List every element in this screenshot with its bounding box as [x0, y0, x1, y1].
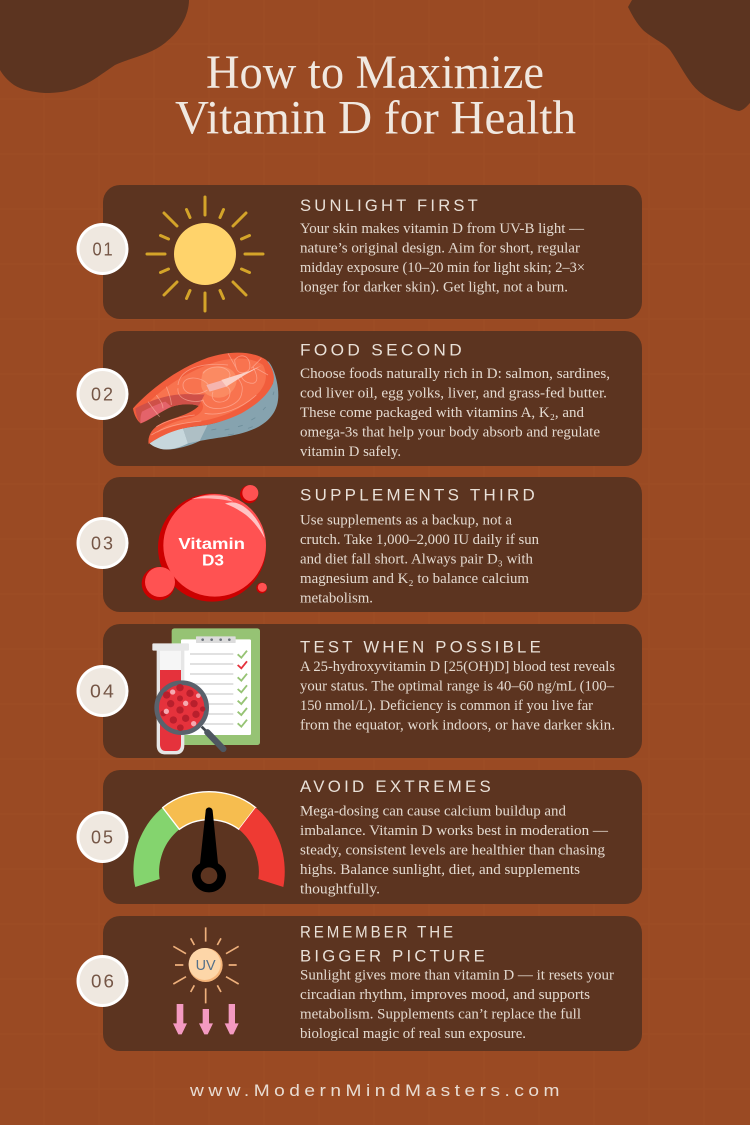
heading: avoid extremes: AVOID EXTREMES	[300, 778, 494, 796]
panel 1: sunlight first	[76, 185, 642, 319]
text: food second: vitamin D safely.	[300, 444, 401, 460]
text: food second: cod liver oil, egg yolks, liver, and grass-fed butter.	[300, 386, 607, 402]
heading: remember the bigger picture	[300, 924, 488, 966]
icon: UV sun with arrows: UV	[196, 958, 216, 974]
icon: blood test and clipboard	[152, 628, 260, 754]
text: avoid extremes: imbalance. Vitamin D works best in moderation —	[300, 823, 608, 839]
text: remember the bigger picture: metabolism. Supplements can’t replace the full	[300, 1006, 581, 1022]
text: sunlight first: longer for darker skin). Get light, not a burn.	[300, 280, 568, 296]
text: food second: These come packaged with vitamins A, K₂, and	[300, 405, 585, 421]
panel 3: supplements third	[76, 477, 642, 612]
number badge 02	[76, 368, 128, 420]
panel 5: avoid extremes	[76, 770, 642, 904]
text: sunlight first	[300, 221, 585, 296]
panel 2: food second	[76, 331, 642, 466]
text: food second: Choose foods naturally rich in D: salmon, sardines,	[300, 366, 610, 382]
text: sunlight first: Your skin makes vitamin D from UV-B light —	[300, 221, 584, 237]
heading: test when possible: TEST WHEN POSSIBLE	[300, 638, 544, 656]
text: sunlight first: midday exposure (10–20 min for light skin; 2–3×	[300, 260, 585, 276]
text: sunlight first: nature’s original design. Aim for short, regular	[300, 240, 580, 256]
decorative blob: top right	[628, 0, 750, 111]
text: food second: omega-3s that help your body absorb and regulate	[300, 424, 600, 440]
text: supplements third: and diet fall short. Always pair D₃ with	[300, 552, 534, 568]
panel 6: remember the bigger picture	[76, 916, 642, 1051]
decorative blob: top left	[0, 0, 189, 93]
heading: remember the bigger picture: REMEMBER THE	[300, 924, 456, 942]
text: supplements third: Use supplements as a backup, not a	[300, 512, 513, 528]
number badge 01: 01	[92, 240, 114, 260]
text: remember the bigger picture	[300, 968, 614, 1042]
footer url: www.ModernMindMasters.com	[189, 1081, 564, 1100]
number badge 06: 06	[91, 972, 116, 992]
number badge 03: 03	[91, 534, 115, 554]
number badge 05: 05	[91, 828, 115, 848]
text: avoid extremes: thoughtfully.	[300, 882, 380, 898]
heading: food second: FOOD SECOND	[300, 342, 465, 360]
text: supplements third: metabolism.	[300, 590, 373, 606]
text: remember the bigger picture: biological magic of real sun exposure.	[300, 1026, 526, 1042]
number badge 03	[76, 517, 128, 569]
label: Vitamin D3	[178, 536, 245, 570]
label: Vitamin D3: D3	[202, 553, 224, 570]
number badge 02: 02	[91, 384, 115, 404]
text: remember the bigger picture: Sunlight gives more than vitamin D — it resets your	[300, 968, 614, 984]
heading: supplements third: SUPPLEMENTS THIRD	[300, 486, 538, 504]
text: supplements third: magnesium and K₂ to balance calcium	[300, 571, 530, 587]
text: supplements third	[300, 512, 540, 606]
text: avoid extremes: highs. Balance sunlight, diet, and supplements	[300, 862, 580, 878]
icon: gauge	[133, 792, 285, 892]
text: supplements third: crutch. Take 1,000–2,000 IU daily if sun	[300, 532, 540, 548]
text: test when possible: 150 nmol/L). Deficiency is common if you live far	[300, 698, 593, 714]
icon: salmon steak	[133, 353, 278, 449]
number badge 05	[76, 811, 128, 863]
text: test when possible: from the equator, work indoors, or have darker skin.	[300, 718, 615, 734]
number badge 04: 04	[90, 682, 116, 702]
number badge 06	[76, 955, 128, 1007]
icon: vitamin D3 droplet	[142, 485, 267, 602]
label: Vitamin D3: Vitamin	[178, 536, 245, 553]
number badge 01	[76, 223, 128, 275]
title	[175, 47, 576, 144]
text: food second	[300, 366, 610, 460]
icon: UV sun with arrows	[173, 927, 239, 1034]
text: avoid extremes	[300, 804, 608, 898]
number badge 04	[76, 665, 128, 717]
heading: sunlight first: SUNLIGHT FIRST	[300, 197, 481, 215]
text: avoid extremes: steady, consistent levels are healthier than chasing	[300, 842, 606, 858]
heading: remember the bigger picture: BIGGER PICTURE	[300, 948, 488, 966]
panel 4: test when possible	[76, 624, 642, 758]
title: Vitamin D for Health	[175, 92, 576, 144]
text: test when possible: your status. The optimal range is 40–60 ng/mL (100–	[300, 678, 615, 694]
text: test when possible	[300, 659, 615, 734]
icon: sun	[147, 197, 263, 311]
title: How to Maximize	[206, 47, 544, 99]
text: remember the bigger picture: circadian rhythm, improves mood, and supports	[300, 987, 590, 1003]
text: avoid extremes: Mega-dosing can cause calcium buildup and	[300, 804, 567, 820]
text: test when possible: A 25-hydroxyvitamin D [25(OH)D] blood test reveals	[300, 659, 615, 675]
